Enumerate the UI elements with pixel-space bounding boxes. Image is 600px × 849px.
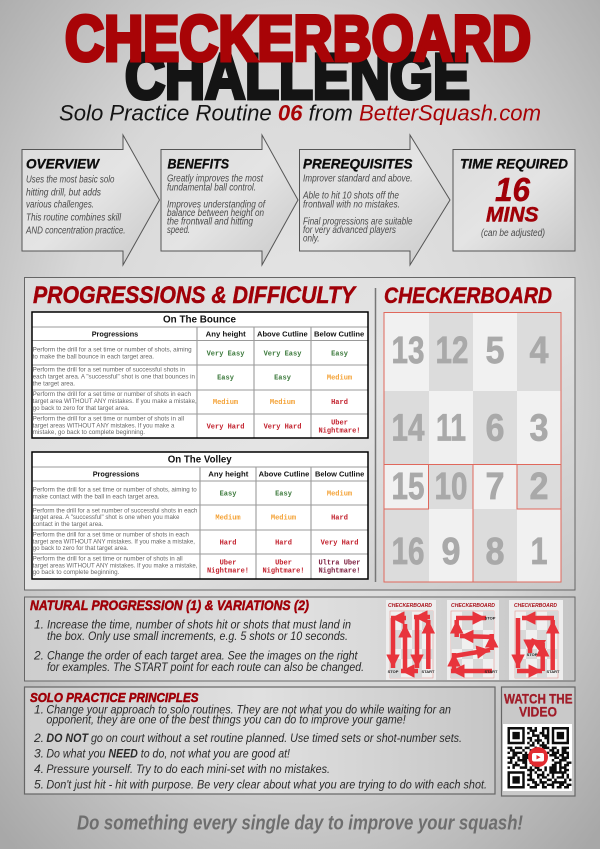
table: on the volley: Nightmare! xyxy=(262,568,305,576)
table: on the bounce: Perform the drill for a set time or number of shots, aiming xyxy=(33,348,192,354)
panel: watch the video xyxy=(502,687,575,796)
table: on the bounce: Medium xyxy=(270,399,295,407)
table: on the bounce: Perform the drill for a set number of successful shots in xyxy=(33,368,185,374)
list: progression steps xyxy=(33,618,364,674)
list: progression steps: for examples. The START point for each route can also be changed. xyxy=(47,660,364,674)
table: on the volley: Uber xyxy=(220,559,236,567)
checkerboard grid: 13 xyxy=(392,330,424,372)
table: on the bounce: Very Hard xyxy=(264,423,301,431)
list: progression steps: 1. xyxy=(34,618,44,632)
arrow panel: benefits: speed. xyxy=(167,225,190,236)
list: principles: Change your approach to solo routines. They are not what you do while waiting for an xyxy=(46,703,451,717)
panel: natural progression and variations xyxy=(24,597,575,681)
title: CHECKERBOARD xyxy=(65,2,531,74)
table: on the volley: Below Cutline xyxy=(315,470,364,479)
table: on the volley: target area. A "successful" shot is one when you make xyxy=(33,515,180,521)
table: on the volley: Hard xyxy=(275,539,292,547)
arrow panel: overview: AND concentration practice. xyxy=(25,226,125,237)
panel: time required: MINS xyxy=(486,203,538,226)
thumbnail: route 3: STOP xyxy=(527,652,538,657)
arrow panel: overview: OVERVIEW xyxy=(26,155,101,171)
table: on the volley: Ultra Uber xyxy=(318,559,361,567)
table: on the bounce: Any height xyxy=(206,330,246,338)
table: on the volley: Nightmare! xyxy=(207,568,249,576)
table: on the bounce: Easy xyxy=(217,375,235,383)
table: on the volley: Perform the drill for a set time or number of shots in all xyxy=(33,557,183,563)
heading: watch the video: VIDEO xyxy=(519,704,557,720)
table: on the bounce: Uber xyxy=(331,419,348,427)
checkerboard grid: 10 xyxy=(434,466,468,508)
table: on the bounce: each target area. A "successful" shot is one that bounces in xyxy=(33,375,195,381)
heading: solo practice principles: SOLO PRACTICE PRINCIPLES xyxy=(30,691,199,705)
list: principles: opponent, they are one of the best things you can do to improve your game! xyxy=(46,713,406,727)
table: on the bounce: go back to zero for that target area. xyxy=(33,406,130,412)
table: on the volley: Progressions xyxy=(93,470,139,479)
table: on the volley: contact in the target area. xyxy=(33,522,104,528)
checkerboard grid: 2 xyxy=(530,466,548,508)
list: progression steps: the box. Only use small increments, e.g. 5 shots or 10 seconds. xyxy=(47,629,348,643)
list: principles: Do what you NEED to do, not what you are good at! xyxy=(46,747,291,761)
table: on the volley: Medium xyxy=(327,491,352,499)
panel: time required: TIME REQUIRED xyxy=(460,155,568,171)
table: on the bounce: to make the ball bounce in each target area. xyxy=(33,354,154,360)
table: on the volley: Perform the drill for a set time or number of shots in each xyxy=(33,533,189,539)
checkerboard grid: 8 xyxy=(486,531,504,573)
table: on the volley: Medium xyxy=(271,515,296,523)
table: on the bounce: Easy xyxy=(274,375,292,383)
thumbnail: route 2: STOP xyxy=(485,616,496,620)
table: on the bounce: Very Hard xyxy=(207,423,244,431)
arrow panel: benefits: BENEFITS xyxy=(168,155,230,171)
table: on the bounce: target area WITHOUT ANY mistakes. If you make a mistake, xyxy=(33,399,197,405)
qr code xyxy=(503,724,572,791)
panel: time required: (can be adjusted) xyxy=(481,228,545,239)
checkerboard grid: 16 xyxy=(392,531,424,573)
table: on the bounce: Above Cutline xyxy=(257,330,308,338)
table: on the volley xyxy=(32,452,368,579)
table: on the bounce: Perform the drill for a set time or number of shots in all xyxy=(33,417,184,423)
arrow panel: prerequisites: Improver standard and above. xyxy=(303,174,412,185)
arrow panel: benefits xyxy=(161,135,298,265)
list: principles: 4. xyxy=(34,762,44,776)
thumbnail: route 3: CHECKERBOARD xyxy=(514,603,557,609)
arrow panel: prerequisites: for very advanced players xyxy=(303,225,396,236)
checkerboard grid: 15 xyxy=(392,466,424,508)
thumbnail: route 1: STOP xyxy=(388,669,399,674)
arrow panel: prerequisites: Final progressions are suitable xyxy=(303,216,413,227)
table: on the bounce: Very Easy xyxy=(207,351,245,359)
table: on the volley: Medium xyxy=(215,515,241,523)
heading: progressions and difficulty: PROGRESSIONS & DIFFICULTY xyxy=(33,282,357,309)
arrow panel: overview: This routine combines skill xyxy=(26,213,122,224)
table: on the bounce: Easy xyxy=(331,351,349,359)
arrow panel: prerequisites: PREREQUISITES xyxy=(303,155,413,171)
table: on the bounce: Perform the drill for a set time or number of shots in each xyxy=(33,392,191,398)
table: on the bounce: Medium xyxy=(213,399,238,407)
checkerboard grid: 14 xyxy=(392,408,424,450)
table: on the bounce: Hard xyxy=(331,399,348,407)
list: principles: Pressure yourself. Try to do each mini-set with no mistakes. xyxy=(46,762,330,776)
checkerboard grid xyxy=(384,312,561,582)
table: on the bounce: Medium xyxy=(327,375,352,383)
arrow panel: benefits: the frontwall and hitting xyxy=(167,216,253,227)
table: on the volley: go back to zero for that target area. xyxy=(33,546,129,552)
checkerboard grid: 4 xyxy=(530,330,548,372)
arrow panel: prerequisites: only. xyxy=(303,233,320,244)
thumbnail: route 2: START xyxy=(484,669,498,674)
table: on the bounce: Below Cutline xyxy=(314,330,364,338)
table: on the volley: make contact with the ball in each target area. xyxy=(33,495,160,501)
table: on the bounce: target areas WITHOUT ANY mistakes. If you make a xyxy=(33,424,175,430)
table: on the volley: Uber xyxy=(275,559,292,567)
table: on the volley: Easy xyxy=(220,491,237,499)
heading: watch the video: WATCH THE xyxy=(504,692,572,707)
arrow panel: overview: hitting drill, but adds xyxy=(26,187,101,198)
arrow panel: prerequisites: frontwall with no mistakes. xyxy=(303,199,400,210)
list: principles: 2. xyxy=(33,731,44,745)
arrow panel: benefits: balance between height on xyxy=(167,208,264,219)
subtitle: Solo Practice Routine 06 from BetterSquash.com xyxy=(59,101,541,126)
checkerboard grid: 1 xyxy=(530,531,548,573)
thumbnail: route 3: START xyxy=(546,669,560,674)
table: on the volley: target area WITHOUT ANY mistakes. If you make a mistake, xyxy=(33,539,195,545)
heading: natural progression: NATURAL PROGRESSION (1) & VARIATIONS (2) xyxy=(30,597,309,613)
list: principles: DO NOT go on court without a set routine planned. Use timed sets or shot-number sets. xyxy=(46,731,462,745)
table: on the bounce: Very Easy xyxy=(264,351,302,359)
table: on the bounce: the target area. xyxy=(33,381,75,387)
heading: checkerboard: CHECKERBOARD xyxy=(384,283,552,308)
table: on the volley: On The Volley xyxy=(168,455,232,466)
thumbnail: route 1: START xyxy=(421,669,435,674)
table: on the volley: Very Hard xyxy=(321,539,358,547)
arrow panel: prerequisites: Able to hit 10 shots off the xyxy=(302,191,399,202)
checkerboard grid: 11 xyxy=(436,408,466,450)
panel: time required xyxy=(453,150,575,251)
table: on the bounce: Progressions xyxy=(92,330,138,338)
list: principles: 3. xyxy=(34,747,44,761)
table: on the bounce: mistake, go back to complete beginning. xyxy=(33,430,145,436)
table: on the volley: Hard xyxy=(331,515,348,523)
list: principles: 1. xyxy=(34,703,44,717)
arrow panel: benefits: fundamental ball control. xyxy=(167,182,256,193)
list: progression steps: Change the order of each target area. See the images on the right xyxy=(47,649,358,663)
arrow panel: overview: Uses the most basic solo xyxy=(26,174,115,185)
table: on the volley: Perform the drill for a set time or number of shots, aiming to xyxy=(33,488,197,494)
arrow panel: benefits: Greatly improves the most xyxy=(167,174,264,185)
table: on the volley: Any height xyxy=(208,470,249,479)
checkerboard grid: 6 xyxy=(486,408,504,450)
checkerboard grid: 9 xyxy=(442,531,460,573)
thumbnail: route 2: CHECKERBOARD xyxy=(451,603,495,609)
arrow panel: overview: various challenges. xyxy=(26,200,94,211)
title: CHALLENGE xyxy=(125,40,470,112)
thumbnail: route 1: CHECKERBOARD xyxy=(388,603,432,609)
list: principles: 5. xyxy=(34,778,44,792)
list: principles: Don't just hit - hit with purpose. Be very clear about what you are trying to do with each shot. xyxy=(46,778,487,792)
thumbnail: route 2 xyxy=(447,600,499,680)
checkerboard grid: 5 xyxy=(486,330,504,372)
list: principles xyxy=(33,703,487,792)
panel: time required: 16 xyxy=(495,171,531,208)
checkerboard grid: 3 xyxy=(530,408,548,450)
panel: solo practice principles xyxy=(24,687,495,794)
panel: progressions and checkerboard xyxy=(24,278,575,590)
table: on the bounce: Nightmare! xyxy=(318,427,361,435)
thumbnail: route 1 xyxy=(386,600,436,680)
table: on the volley: Easy xyxy=(275,491,293,499)
arrow panel: benefits: Improves understanding of xyxy=(167,199,266,210)
table: on the volley: target areas WITHOUT ANY mistakes. If you make a mistake, xyxy=(33,563,198,569)
list: progression steps: Increase the time, number of shots hit or shots that must land in xyxy=(47,618,351,632)
checkerboard grid: 7 xyxy=(486,466,504,508)
table: on the bounce xyxy=(32,312,368,438)
title xyxy=(65,2,531,112)
checkerboard grid: 12 xyxy=(436,330,468,372)
table: on the bounce: On The Bounce xyxy=(163,315,236,326)
table: on the volley: Hard xyxy=(220,539,236,547)
heading: watch the video xyxy=(504,692,572,720)
table: on the volley: Perform the drill for a set number of successful shots in each xyxy=(33,508,197,514)
table: on the volley: Nightmare! xyxy=(318,568,361,576)
footer slogan: Do something every single day to improve your squash! xyxy=(77,813,523,835)
list: progression steps: 2. xyxy=(33,649,44,663)
arrow panel: prerequisites xyxy=(300,135,450,265)
table: on the volley: go back to complete beginning. xyxy=(33,570,120,576)
thumbnail: route 3 xyxy=(509,600,563,680)
table: on the volley: Above Cutline xyxy=(259,470,309,479)
arrow panel: overview xyxy=(22,135,160,265)
